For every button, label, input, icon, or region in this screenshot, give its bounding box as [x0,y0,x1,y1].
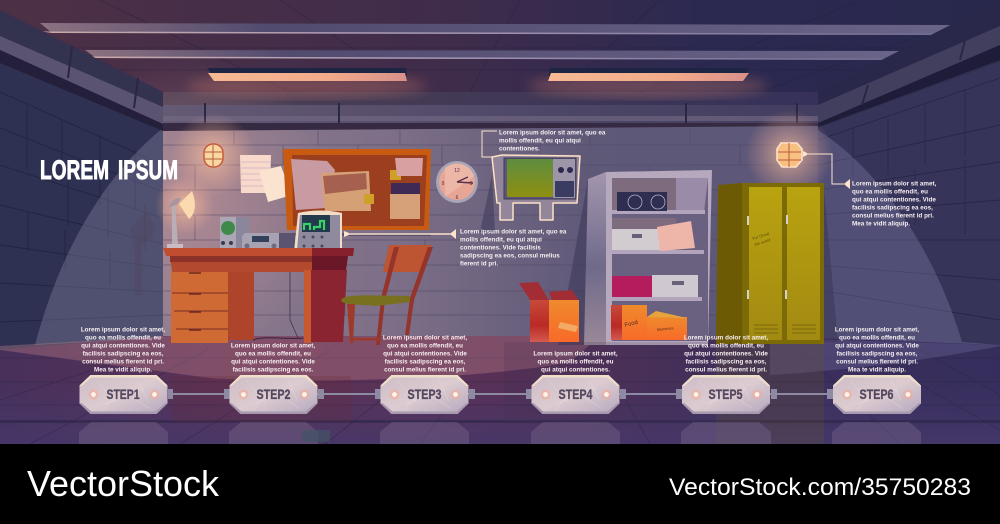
text: step 1: quo ea mollis offendit, eu [85,334,161,342]
text: device callout: sadipscing ea eos, consul melius [460,252,560,260]
text: device callout: contentiones. Vide facilisis [460,244,541,252]
text: step 5: qui atqui contentiones. Vide [684,350,768,358]
wall clock: 3 [470,181,473,187]
connector: device callout [344,229,456,239]
text: TV callout: Lorem ipsum dolor sit amet, quo ea [499,130,606,136]
watermark: url: VectorStock.com/35750283 [669,474,971,501]
text: step 1 [81,326,165,374]
pipes [0,0,1000,131]
text: step 6: Lorem ipsum dolor sit amet, [835,326,919,334]
ceiling [0,0,1000,92]
step 4 plate: STEP4 [558,386,593,402]
wall shadows [286,175,838,345]
text: step 4: qui atqui contentiones. [541,366,610,374]
floor light pool: right [770,338,1000,375]
text: lamp callout: facilisis sadipscing ea eos, [852,204,933,212]
title: LOREM [40,155,109,185]
text: step 5: Lorem ipsum dolor sit amet, [684,334,768,342]
corkboard [283,149,431,230]
text: step 1: Mea te vidit aliquip. [94,366,152,374]
chair [341,245,433,345]
text: step 3: quo ea mollis offendit, eu [387,342,463,350]
step 1 plate [80,375,168,414]
desk [163,248,354,343]
text: step 6: Mea te vidit aliquip. [848,366,906,374]
step 4 plate [532,375,620,414]
text: step 2: qui atqui contentiones. Vide [231,358,315,366]
storage box [612,229,660,250]
text: step 1: consul melius fierent id pri. [82,358,164,366]
step 5 plate: STEP5 [708,386,743,402]
storage box 2 [652,275,698,297]
shelf unit: Memories [657,326,674,332]
text: step 6: quo ea mollis offendit, eu [839,334,915,342]
text: lamp callout: consul melius fierent id pri. [852,212,934,220]
text: step 4: quo ea mollis offendit, eu [538,358,614,366]
text: step 4 [533,350,618,374]
step 3 plate [380,375,468,414]
TV set [492,155,580,220]
text: step 3 [383,334,467,374]
floor light pool [0,336,600,381]
text: step 3: qui atqui contentiones. Vide [383,350,467,358]
step 6 plate [833,375,921,414]
ceiling lamp: right [528,68,768,98]
text: lamp callout: quo ea mollis offendit, eu [852,188,928,196]
left wall [0,62,163,350]
text: step 3: facilisis sadipscing ea eos, [385,358,466,366]
lamp shadow [130,212,155,295]
text: step 1: Lorem ipsum dolor sit amet, [81,326,165,334]
back wall [163,123,818,338]
text: step 6: facilisis sadipscing ea eos, [837,350,918,358]
title: IPSUM [118,155,178,185]
step 6 plate: STEP6 [860,386,894,402]
wall lamp: left [171,113,255,197]
step 1 plate: STEP1 [106,386,140,402]
yellow lockers: the world [754,237,771,247]
text: step 1: facilisis sadipscing ea eos, [83,350,164,358]
wall clock [436,161,478,203]
towels [612,276,656,297]
step 5 plate [682,375,770,414]
shelf unit [584,170,712,345]
step 2 plate [230,375,318,414]
right wall [818,62,1000,345]
pillow [657,221,695,251]
lamp on desk [155,175,215,248]
text: step 6 [835,326,919,374]
text: step 5: facilisis sadipscing ea eos, [686,358,767,366]
ceiling beams [40,23,950,60]
text: step 4: Lorem ipsum dolor sit amet, [533,350,618,358]
text: TV callout: mollis offendit, eu qui atqui [499,138,581,144]
text: step 3: consul melius fierent id pri. [384,366,466,374]
wall clock: 6 [456,195,459,201]
spotlight: left [35,128,163,345]
radio unit [242,233,295,249]
wall clock: 12 [454,168,460,174]
text: step 2: facilisis sadipscing ea eos. [233,366,314,374]
text: step 2: quo ea mollis offendit, eu [235,350,311,358]
text: step 5: consul melius fierent id pri. [685,366,767,374]
wall lamp: right [745,110,833,198]
text: step 6: consul melius fierent id pri. [836,358,918,366]
text: step 2: Lorem ipsum dolor sit amet, [231,342,315,350]
text: step 5 [684,334,768,374]
text: TV callout: contentiones. [499,146,540,152]
watermark bar [0,444,1000,524]
step 2 plate: STEP2 [256,386,291,402]
text: device callout: Lorem ipsum dolor sit amet, quo ea [460,228,567,236]
text: lamp callout: Lorem ipsum dolor sit amet, [852,180,937,188]
timeline connector [168,389,898,399]
connector: TV text bracket [482,131,497,157]
text: step 5: quo ea mollis offendit, eu [688,342,764,350]
back wall upper band [160,92,820,106]
watermark: brand: VectorStock [27,463,220,504]
yellow lockers [716,183,824,344]
text: step 6: qui atqui contentiones. Vide [835,342,919,350]
notes pinned on wall [240,155,292,202]
open carton [519,282,579,342]
text: step 3: Lorem ipsum dolor sit amet, [383,334,467,342]
text: lamp callout: Mea te vidit aliquip. [852,220,910,228]
text: device callout: mollis offendit, eu qui atqui [460,236,542,244]
text: device callout: fierent id pri. [460,260,498,268]
text: step 1: qui atqui contentiones. Vide [81,342,165,350]
floor [0,336,1000,444]
yellow lockers: For Great [752,231,770,241]
step 3 plate: STEP3 [408,386,442,402]
text: step 2 [231,342,315,374]
ceiling lamp: left [187,68,427,98]
text: lamp callout: qui atqui contentiones. Vide [852,196,936,204]
food box [611,305,622,340]
spotlight: right [818,130,1000,345]
connector: lamp callout [803,151,850,189]
text: device callout [460,228,567,268]
text: lamp callout [852,180,937,228]
text: TV callout [499,130,606,152]
floor reflections [79,342,921,444]
wall clock: 9 [442,181,445,187]
monitor device [294,210,342,252]
shelf unit: Food [624,320,639,329]
radar unit [220,217,249,249]
speakers [617,192,667,211]
